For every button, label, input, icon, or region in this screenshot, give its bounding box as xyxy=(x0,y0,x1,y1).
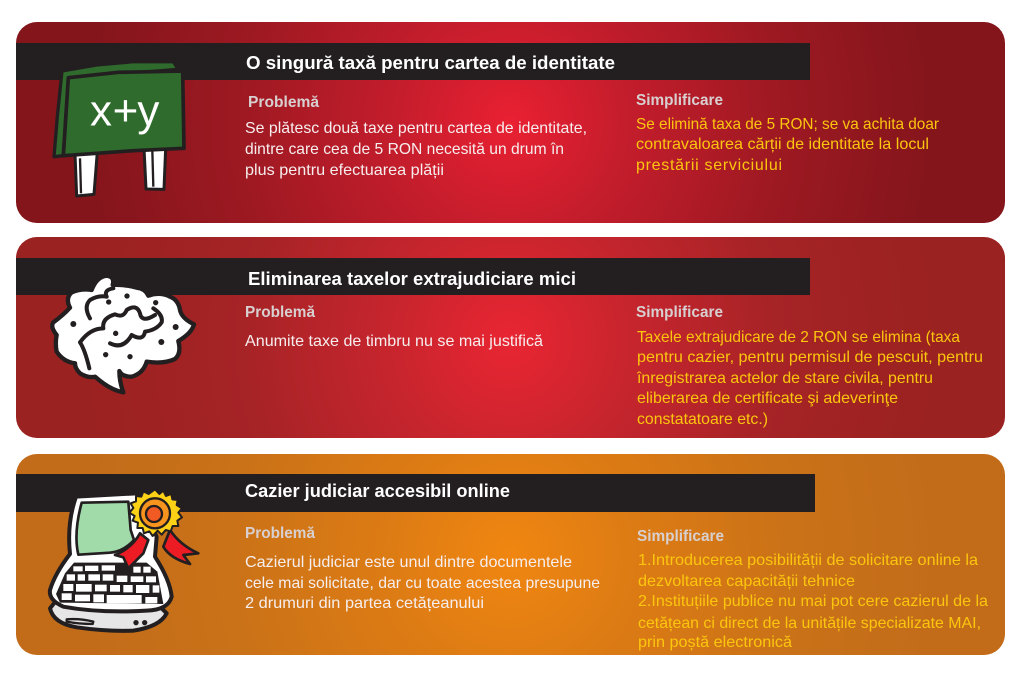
problem text: dintre care cea de 5 RON necesită un drum în xyxy=(245,141,564,158)
problem text: 2 drumuri din partea cetățeanului xyxy=(245,595,484,612)
problem text: plus pentru efectuarea plății xyxy=(245,162,444,179)
simplification label: Simplificare xyxy=(637,528,724,545)
heading bar xyxy=(16,43,810,80)
simplification text: înregistrarea actelor de stare civila, pentru xyxy=(636,370,933,387)
problem label: Problemă xyxy=(245,304,315,321)
simplification text: prestării serviciului xyxy=(636,157,782,174)
panel background xyxy=(16,454,1005,655)
simplification text: constatatoare etc.) xyxy=(637,411,768,428)
icon: chalkboard: x+y xyxy=(90,86,159,135)
problem label: Problemă xyxy=(248,94,319,111)
icon: brain xyxy=(52,276,194,392)
panel: cazier judiciar xyxy=(16,454,1005,655)
heading bar xyxy=(16,474,815,512)
simplification text: pentru cazier, pentru permisul de pescuit, pentru xyxy=(637,349,983,366)
icon: laptop with rosette xyxy=(50,489,198,631)
panel: taxe extrajudiciare xyxy=(16,237,1005,438)
heading: Cazier judiciar accesibil online xyxy=(245,480,510,501)
panel: carte de identitate xyxy=(16,22,1005,223)
problem label: Problemă xyxy=(245,525,315,542)
simplification text: contravaloarea cărții de identitate la locul xyxy=(636,136,929,153)
simplification text: prin poștă electronică xyxy=(638,634,792,651)
panel background xyxy=(16,22,1005,223)
simplification text: Se elimină taxa de 5 RON; se va achita doar xyxy=(636,116,940,133)
problem text: Cazierul judiciar este unul dintre documentele xyxy=(245,554,572,571)
problem text: cele mai solicitate, dar cu toate acestea presupune xyxy=(245,575,600,592)
simplification label: Simplificare xyxy=(636,304,723,321)
heading: Eliminarea taxelor extrajudiciare mici xyxy=(248,268,576,289)
problem text: Se plătesc două taxe pentru cartea de identitate, xyxy=(245,120,587,137)
problem text: Anumite taxe de timbru nu se mai justifică xyxy=(245,333,543,350)
simplification label: Simplificare xyxy=(636,92,723,109)
simplification text: 2.Instituțiile publice nu mai pot cere cazierul de la xyxy=(638,593,988,610)
problem text xyxy=(245,554,600,612)
simplification text: eliberarea de certificate şi adeverinţe xyxy=(637,390,898,407)
simplification text: Taxele extrajudicare de 2 RON se elimina (taxa xyxy=(637,329,960,346)
heading: O singură taxă pentru cartea de identitate xyxy=(246,52,615,73)
heading bar xyxy=(16,258,810,295)
simplification text: dezvoltarea capacității tehnice xyxy=(638,573,855,590)
simplification text xyxy=(636,329,983,428)
simplification text: cetățean ci direct de la unitățile specializate MAI, xyxy=(638,615,981,632)
panel background xyxy=(16,237,1005,438)
simplification text xyxy=(638,552,988,651)
simplification text: 1.Introducerea posibilității de solicitare online la xyxy=(638,552,978,569)
simplification text xyxy=(636,116,940,174)
problem text xyxy=(245,120,587,179)
icon: chalkboard xyxy=(54,62,184,196)
